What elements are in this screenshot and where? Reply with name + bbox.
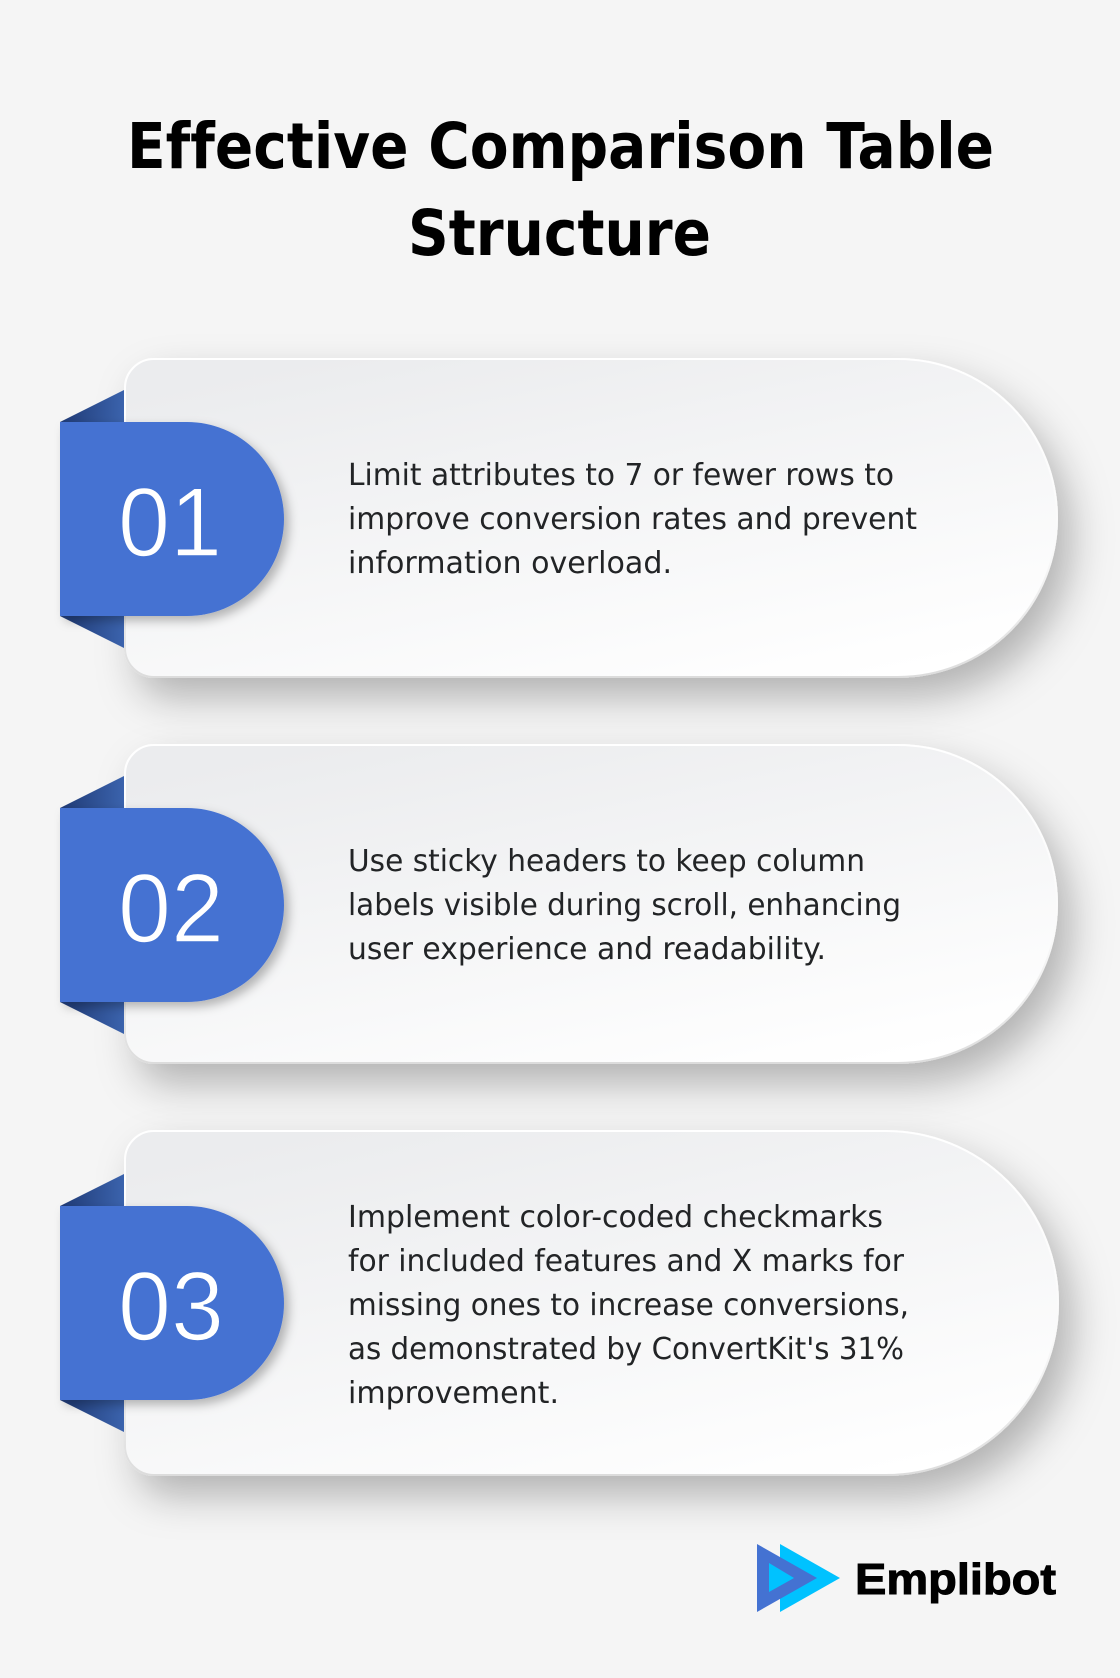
text 03: for included features and X marks for [348, 1244, 905, 1279]
card 02 [125, 745, 1057, 1063]
title [127, 110, 994, 270]
text 02: labels visible during scroll, enhancing [348, 888, 901, 923]
text 01: Limit attributes to 7 or fewer rows to [348, 458, 894, 493]
number 02: 02 [118, 853, 224, 963]
panel: step 03 [60, 1131, 1058, 1475]
text 01: improve conversion rates and prevent [348, 502, 917, 537]
number badge 02 [60, 808, 284, 1002]
ribbon fold 02 [60, 776, 124, 1034]
logo: Emplibot [757, 1544, 1056, 1612]
card 01 [125, 359, 1057, 677]
number badge 01 [60, 422, 284, 616]
text 02: Use sticky headers to keep column [348, 844, 865, 879]
number 03: 03 [118, 1251, 224, 1361]
number 01: 01 [118, 467, 222, 577]
icon: play triangles [757, 1544, 840, 1612]
ribbon fold 01 [60, 390, 124, 648]
text 02: user experience and readability. [348, 932, 826, 967]
panel: step 02 [60, 745, 1057, 1063]
text 03: improvement. [348, 1376, 559, 1411]
text 01 [348, 458, 917, 581]
text 03 [348, 1200, 909, 1411]
title: Effective Comparison Table [127, 110, 994, 183]
text 02 [348, 844, 901, 967]
text 03: as demonstrated by ConvertKit's 31% [348, 1332, 904, 1367]
number badge 03 [60, 1206, 284, 1400]
text 01: information overload. [348, 546, 672, 581]
wordmark: Emplibot [855, 1555, 1056, 1604]
panel: step 01 [60, 359, 1057, 677]
card 03 [125, 1131, 1058, 1475]
text 03: missing ones to increase conversions, [348, 1288, 909, 1323]
ribbon fold 03 [60, 1174, 124, 1432]
title: Structure [408, 197, 711, 270]
text 03: Implement color-coded checkmarks [348, 1200, 883, 1235]
